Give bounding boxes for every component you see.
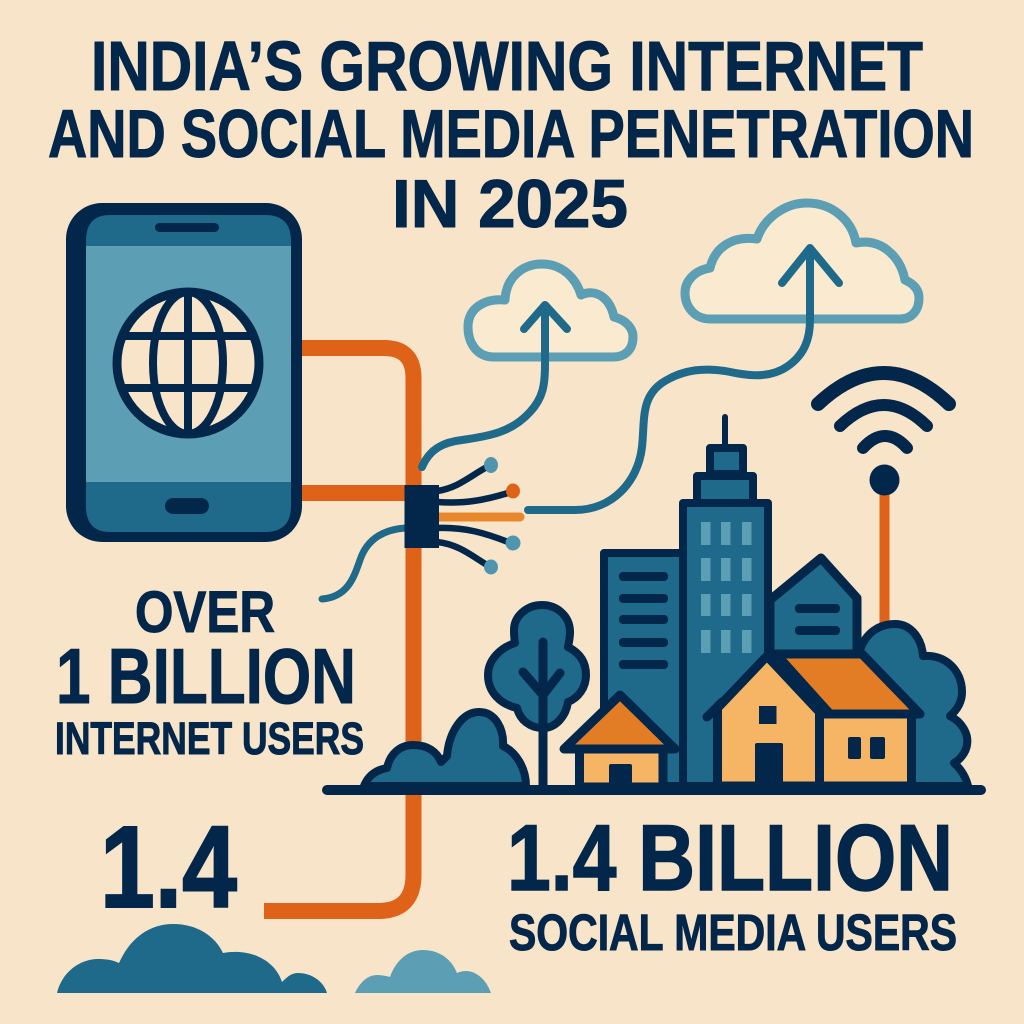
arrow to right cloud bbox=[528, 248, 839, 510]
stat: over 1 billion internet users: OVER bbox=[135, 580, 275, 645]
stat: 1.4: 1.4 bbox=[100, 802, 237, 932]
house-shaped building bbox=[770, 558, 857, 655]
tall tower bbox=[683, 417, 768, 786]
stat: over 1 billion internet users bbox=[55, 580, 364, 764]
bush left bbox=[364, 712, 526, 786]
left building bbox=[604, 553, 684, 786]
building windows bbox=[619, 572, 840, 669]
cloud right bbox=[685, 203, 919, 319]
icon: globe bbox=[117, 292, 259, 434]
stat: over 1 billion internet users: INTERNET USERS bbox=[55, 713, 364, 764]
stat: 1.4 billion social media users: 1.4 BILLION bbox=[507, 805, 953, 910]
orange cable bbox=[264, 348, 414, 911]
arrow to left cloud bbox=[422, 305, 567, 467]
city skyline bbox=[364, 417, 968, 787]
tower windows bbox=[701, 522, 752, 653]
cloud light bottom bbox=[355, 950, 491, 993]
large house bbox=[707, 654, 920, 786]
frayed wires connector bbox=[404, 457, 520, 574]
title bbox=[48, 27, 974, 242]
cable from lower left bbox=[322, 528, 405, 599]
icon: wifi signal tower bbox=[818, 373, 949, 630]
tree bbox=[488, 605, 586, 786]
cloud left bbox=[468, 264, 633, 357]
bush right bbox=[860, 624, 968, 786]
small house bbox=[564, 695, 675, 787]
ground line bbox=[322, 785, 986, 795]
stat: 1.4 billion social media users bbox=[507, 805, 957, 961]
title: IN 2025 bbox=[392, 166, 628, 242]
icon: smartphone with globe bbox=[66, 203, 302, 542]
cloud dark bottom bbox=[57, 924, 327, 993]
stat: over 1 billion internet users: 1 BILLION bbox=[56, 632, 356, 720]
